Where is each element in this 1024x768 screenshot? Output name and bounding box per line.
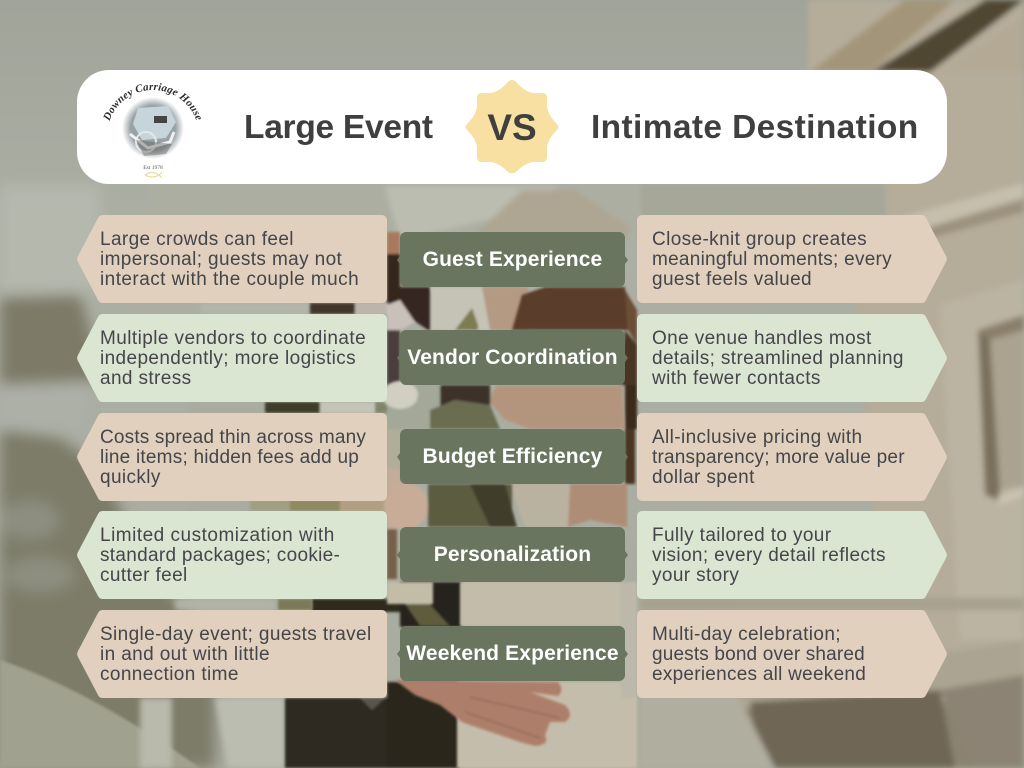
left card: single-day: connection time — [100, 664, 239, 685]
bride skin and dress — [457, 385, 637, 768]
right card: multi-day: Multi-day celebration; — [652, 624, 841, 645]
logo: Downey Carriage House: Downey Carriage House — [103, 83, 201, 122]
right card: close-knit: Close-knit group creates — [652, 229, 867, 250]
left card: single-day — [77, 610, 387, 698]
logo: Downey Carriage House — [103, 83, 201, 178]
right card: fully tailored: vision; every detail reflects — [652, 545, 886, 566]
center label: Personalization — [397, 527, 628, 582]
bouquet — [250, 381, 517, 626]
center label: Budget Efficiency — [397, 429, 628, 484]
center label: Personalization: Personalization — [434, 543, 591, 566]
building — [640, 0, 1024, 768]
left card: large crowds: impersonal; guests may not — [100, 249, 342, 270]
right card: fully tailored: Fully tailored to your — [652, 525, 831, 546]
right card: all-inclusive: transparency; more value per — [652, 447, 905, 468]
left card: costs spread: line items; hidden fees add up — [100, 447, 359, 468]
right card: one venue: One venue handles most — [652, 328, 872, 349]
center label: Budget Efficiency: Budget Efficiency — [423, 445, 602, 468]
left card: limited customization: standard packages; cookie- — [100, 545, 340, 566]
groom hand — [395, 680, 570, 746]
center label: Weekend Experience: Weekend Experience — [406, 642, 619, 665]
center label: Guest Experience: Guest Experience — [423, 248, 602, 271]
trees — [0, 186, 215, 768]
left card: multiple vendors: Multiple vendors to coordinate — [100, 328, 366, 349]
center label: Guest Experience — [397, 232, 628, 287]
center label: Vendor Coordination — [397, 330, 628, 385]
left card: large crowds: interact with the couple much — [100, 269, 359, 290]
left card: large crowds: Large crowds can feel — [100, 229, 294, 250]
badge: VS star: VS — [487, 107, 537, 148]
left card: single-day: Single-day event; guests travel — [100, 624, 372, 645]
right card: one venue: with fewer contacts — [652, 368, 821, 389]
right card: multi-day: guests bond over shared — [652, 644, 865, 665]
right card: close-knit: meaningful moments; every — [652, 249, 892, 270]
header panel — [77, 70, 947, 184]
left card: multiple vendors: independently; more logistics — [100, 348, 356, 369]
right card: close-knit: guest feels valued — [652, 269, 812, 290]
left card: costs spread — [77, 413, 387, 501]
right card: multi-day: experiences all weekend — [652, 664, 866, 685]
right card: fully tailored: your story — [652, 565, 739, 586]
left card: limited customization: cutter feel — [100, 565, 188, 586]
right card: one venue: details; streamlined planning — [652, 348, 904, 369]
left card: limited customization — [77, 511, 387, 599]
right card: all-inclusive — [637, 413, 947, 501]
heading: Large Event: Large Event — [244, 109, 433, 146]
left card: costs spread: Costs spread thin across many — [100, 427, 366, 448]
right card: all-inclusive: All-inclusive pricing with — [652, 427, 863, 448]
wall and greenery behind couple — [430, 287, 530, 331]
badge: VS star — [466, 80, 558, 174]
left card: large crowds — [77, 215, 387, 303]
center label: Vendor Coordination: Vendor Coordination — [407, 346, 618, 369]
left card: costs spread: quickly — [100, 467, 161, 488]
logo: Downey Carriage House: Est 1978 — [143, 165, 163, 171]
left card: multiple vendors — [77, 314, 387, 402]
veil and top area — [150, 184, 640, 240]
right card: multi-day — [637, 610, 947, 698]
left card: multiple vendors: and stress — [100, 368, 191, 389]
right card: fully tailored — [637, 511, 947, 599]
right card: close-knit — [637, 215, 947, 303]
right card: all-inclusive: dollar spent — [652, 467, 755, 488]
center label: Weekend Experience — [397, 626, 628, 681]
left card: single-day: in and out with little — [100, 644, 270, 665]
groom — [285, 232, 462, 768]
right card: one venue — [637, 314, 947, 402]
left card: limited customization: Limited customization with — [100, 525, 335, 546]
heading: Intimate Destination: Intimate Destination — [591, 109, 919, 146]
bride hair — [512, 287, 637, 484]
